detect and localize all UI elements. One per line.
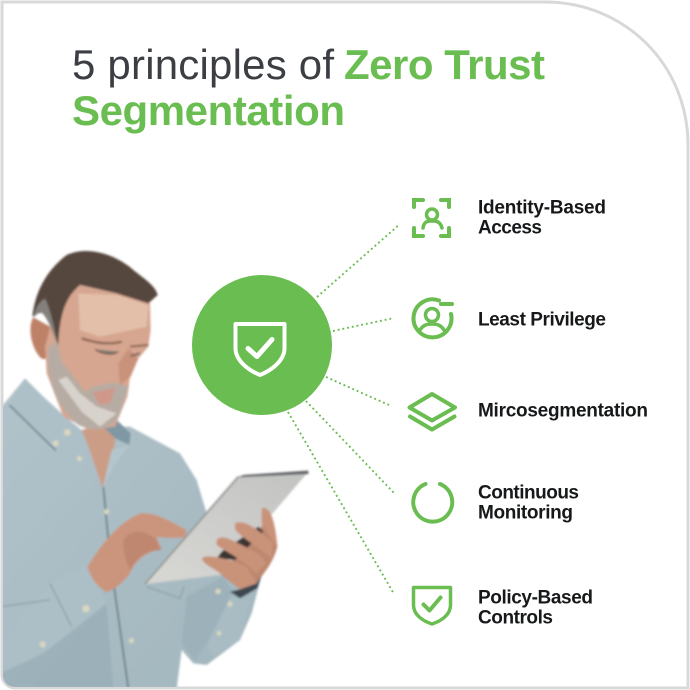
title: Segmentation	[72, 87, 345, 134]
central badge with shield icon	[192, 275, 332, 415]
item: Mircosegmentation: Mircosegmentation	[478, 400, 648, 422]
dotted connectors	[288, 224, 400, 594]
neck	[82, 420, 115, 488]
icon: progress ring	[413, 484, 452, 522]
item: Least Privilege: Least Privilege	[478, 310, 606, 330]
ear	[31, 317, 50, 359]
eyes and brows	[82, 338, 148, 356]
item: Policy-Based Controls: Policy-Based	[478, 588, 593, 608]
face	[45, 285, 151, 430]
icon: user in circle	[414, 299, 452, 337]
shirt	[0, 378, 262, 688]
right hand	[231, 524, 278, 584]
icon: outlined shield check	[414, 588, 450, 624]
beard	[48, 342, 129, 429]
shirt shading	[0, 487, 250, 688]
item: Continuous Monitoring: Monitoring	[478, 502, 573, 524]
item: Least Privilege	[414, 299, 606, 337]
item: Mircosegmentation	[410, 394, 648, 430]
left hand	[87, 513, 187, 592]
tablet	[145, 471, 308, 584]
title: Zero Trust	[344, 41, 545, 88]
buttons	[40, 429, 233, 647]
icon: identity scan	[414, 200, 449, 236]
item: Continuous Monitoring: Continuous	[478, 482, 579, 504]
item: Identity-Based Access: Access	[478, 218, 542, 238]
icon: layers	[410, 394, 455, 430]
item: Identity-Based Access	[414, 198, 606, 238]
photo: man using tablet	[0, 251, 308, 688]
item: Policy-Based Controls: Controls	[478, 608, 553, 628]
item: Identity-Based Access: Identity-Based	[478, 198, 606, 218]
watch band and cuff	[230, 575, 262, 598]
right hand fingers	[202, 508, 277, 589]
title: 5 principles of	[72, 41, 334, 88]
item: Policy-Based Controls	[414, 588, 593, 628]
hair	[32, 251, 158, 345]
item: Continuous Monitoring	[413, 482, 579, 524]
title	[72, 41, 545, 134]
collar	[8, 404, 132, 483]
